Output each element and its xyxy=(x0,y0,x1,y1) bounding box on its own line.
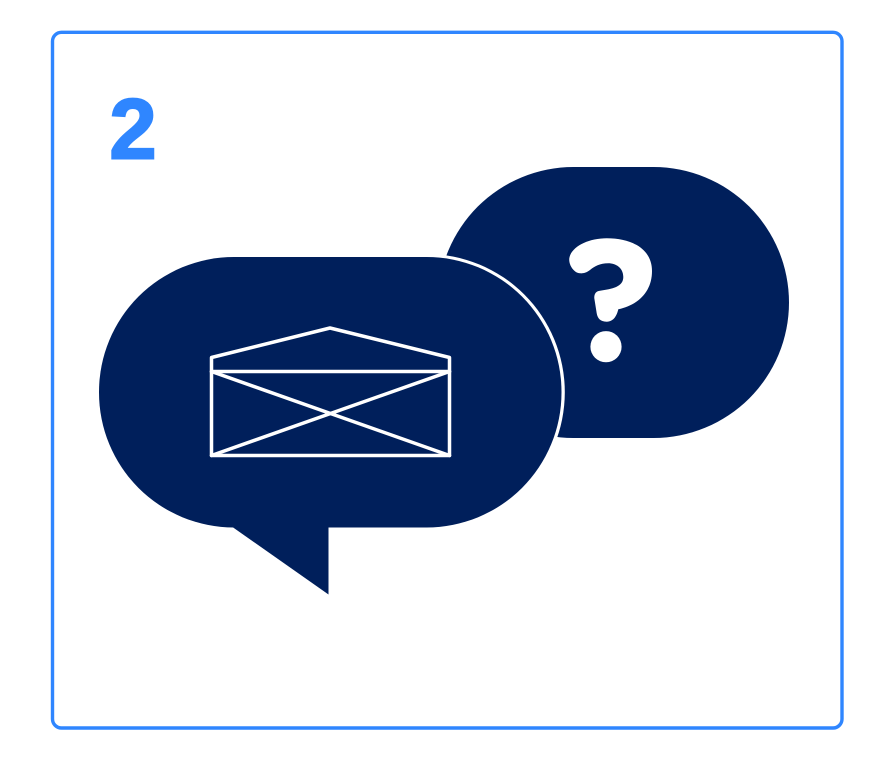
icon: envelope speech bubble xyxy=(96,254,565,594)
bubble outline xyxy=(96,254,565,530)
icon: envelope xyxy=(212,328,450,456)
step number: 2 xyxy=(109,82,157,178)
bubble body xyxy=(438,167,789,438)
icon: question speech bubble xyxy=(438,167,789,438)
icon: question mark xyxy=(569,238,652,362)
bubble tail xyxy=(231,526,328,594)
bubble body xyxy=(99,257,562,528)
